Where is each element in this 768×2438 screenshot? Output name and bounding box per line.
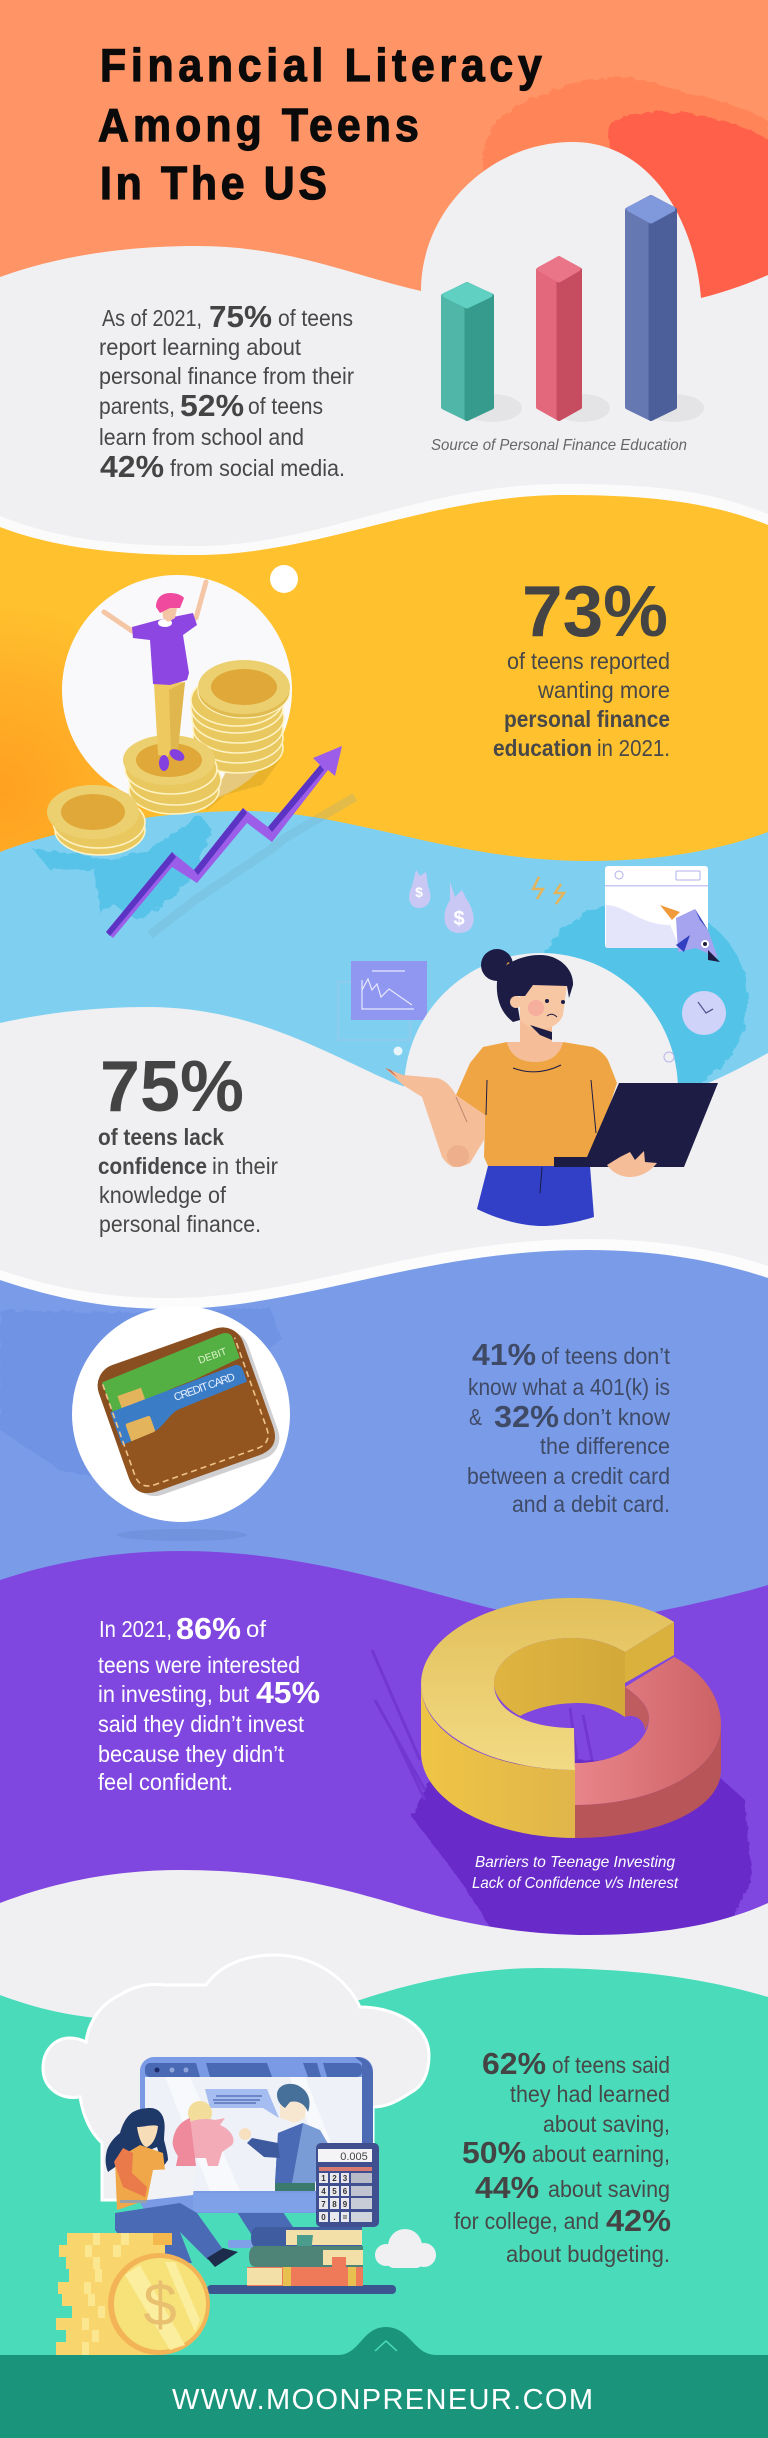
text block: sources of learning: of teens [248,393,323,419]
text block: 73 percent: wanting more [537,677,670,703]
text block: 73 percent: in 2021. [597,735,670,761]
text block: what teens learned about: 42% [606,2203,671,2238]
bun [481,949,513,981]
yellow inner wall [494,1638,625,1717]
girl figure [106,2108,238,2267]
wallet icon: DEBIT [197,1346,228,1367]
text block: what teens learned about: 44% [475,2170,539,2205]
text block: 401k and card difference [467,1337,671,1517]
text block: sources of learning [99,299,354,484]
calculator: 4 [321,2187,326,2196]
text block: interest in investing: teens were interested [98,1652,300,1678]
text block: interest in investing: In 2021, [99,1616,172,1642]
panel: blue background [0,811,768,2438]
calculator: 3 [343,2174,348,2183]
text block: interest in investing [98,1611,320,1795]
blue bar [628,198,674,418]
yellow cut face [625,1622,674,1683]
panel: what teens learned [0,1955,768,2438]
calculator: = [343,2213,348,2222]
coin stack tall [191,660,290,773]
website url: WWW.MOONPRENEUR.COM [172,2384,593,2416]
red bar [538,258,580,418]
monitor [140,2057,396,2294]
text block: interest in investing: 86% [176,1611,241,1646]
icon: chevron up [375,2341,397,2351]
small cloud [375,2229,436,2268]
text block: 75 percent: confidence [98,1153,207,1179]
calculator [316,2143,379,2227]
text block: 401k and card difference: the difference [540,1433,670,1459]
panel: credit card knowledge [0,1239,768,2438]
text block: sources of learning: 52% [180,388,244,423]
title: In The US [100,159,327,209]
illustration: teen on coin stacks [32,582,355,938]
wallet shadow [117,1529,247,1541]
text block: sources of learning: of teens [278,305,353,331]
text block: 73 percent: personal finance [504,706,670,732]
donut chart caption [472,1854,679,1892]
text block: 401k and card difference: between a credit card [467,1463,670,1489]
text block: sources of learning: learn from school and [99,424,304,450]
text block: 401k and card difference: of teens don’t [541,1343,671,1369]
calculator: 9 [343,2200,348,2209]
panel: investing confidence [0,1551,768,2438]
shirt [456,1042,617,1166]
coin shadow [205,745,280,812]
small bubble [270,565,298,593]
text block: what teens learned about: of teens said [552,2052,670,2078]
laptop [554,1083,718,1167]
icon: falling chart [338,961,427,1040]
big dollar coin [108,2253,210,2355]
text block: 401k and card difference: don’t know [563,1404,670,1430]
donut chart caption: Barriers to Teenage Investing [475,1854,675,1871]
text block: 75 percent: 75% [100,1047,244,1127]
wallet icon: CREDIT CARD [172,1371,237,1404]
text block: sources of learning: report learning about [99,334,302,360]
text block: sources of learning: personal finance from their [99,363,354,389]
thought bubble circle [62,575,292,805]
text block: what teens learned about: for college, and [454,2208,599,2234]
calculator: . [333,2213,336,2222]
calculator: 1 [321,2174,326,2183]
text block: what teens learned about: they had learned [510,2081,670,2107]
big dollar coin: $ [143,2271,177,2338]
text block: 401k and card difference: and a debit card. [512,1491,670,1517]
text block: 401k and card difference: 41% [472,1337,536,1372]
text block: what teens learned about: 50% [462,2135,526,2170]
calculator: 0.005 [340,2151,368,2163]
coin stack low [47,785,145,855]
text block: what teens learned about: about saving [548,2176,670,2202]
rising arrow [106,746,342,938]
arm [385,1068,485,1167]
icon: large dollar bag: $ [453,908,465,930]
text block: 73 percent: of teens reported [507,648,670,674]
right arm [590,1095,613,1135]
chart caption: Source of Personal Finance Education [431,437,687,454]
calculator: 8 [332,2200,337,2209]
speech bubble [205,2089,279,2118]
text block: 75 percent: knowledge of [99,1182,227,1208]
calculator: 6 [343,2187,348,2196]
text block: interest in investing: feel confident. [98,1769,233,1795]
text block: 401k and card difference: 32% [494,1399,559,1434]
icon: large dollar bag [444,882,474,933]
yellow side [421,1684,575,1838]
cloud [43,1955,429,2200]
text block: 401k and card difference: know what a 401(k) is [468,1374,670,1400]
panel: gray divider [0,1870,768,2438]
wallet icon [92,1320,285,1503]
text block: what teens learned about: about saving, [543,2111,670,2137]
text block: what teens learned about: 62% [482,2046,546,2081]
text block: 73 percent: education [493,735,592,761]
3D donut chart [421,1598,721,1838]
title [98,41,542,209]
text block: sources of learning: from social media. [170,455,345,481]
icon: small dollar bag: $ [415,884,423,900]
text block: interest in investing: of [246,1616,267,1642]
text block: 75 percent [98,1047,278,1237]
text block: sources of learning: 42% [100,449,164,484]
text block: what teens learned about: about earning, [532,2141,670,2167]
blue splash shadow [32,815,212,920]
icon: browser window with rocket [605,866,720,962]
text block: sources of learning: As of 2021, [102,305,202,331]
icon: lightning bolts [533,877,564,904]
teal bar [444,284,492,418]
text block: interest in investing: in investing, but [98,1681,250,1707]
pink top [575,1657,721,1805]
text block: 75 percent: of teens lack [98,1124,224,1150]
books [247,2227,363,2286]
calculator: 5 [332,2187,337,2196]
arrow shadow [150,797,355,935]
text block: 73 percent [493,572,670,761]
pink side [575,1725,721,1838]
teen figure [104,582,206,771]
text block: interest in investing: because they didn’t [98,1741,285,1767]
pink wall [625,1687,649,1731]
man figure [239,2084,330,2191]
coin stack middle [123,735,221,814]
shorts [477,1166,594,1226]
text block: 73 percent: 73% [522,572,668,652]
calculator: 2 [332,2174,337,2183]
title: Among Teens [98,101,419,151]
calculator: 0 [321,2213,326,2222]
wallet circle [72,1306,290,1522]
coin stack [56,2233,210,2355]
donut chart caption: Lack of Confidence v/s Interest [472,1875,679,1892]
bar chart [444,198,704,422]
hair [497,955,573,1022]
icon: clock [682,991,726,1035]
yellow top [421,1598,674,1770]
text block: 401k and card difference: & [469,1404,482,1430]
text block: 75 percent: personal finance. [99,1211,261,1237]
text block: sources of learning: parents, [99,393,175,419]
icon: small dollar bag [409,870,430,908]
piggy bank [173,2101,234,2166]
neck [507,1015,563,1062]
hand [607,1151,657,1177]
text block: sources of learning: 75% [209,299,272,334]
text block: 75 percent: in their [212,1153,278,1179]
brush stroke [372,1650,752,1950]
title: Financial Literacy [100,41,542,91]
footer [0,2327,768,2438]
calculator: 7 [321,2200,326,2209]
text block: what teens learned about: about budgeting. [506,2241,670,2267]
face [520,985,567,1029]
text block: interest in investing: said they didn’t invest [98,1711,305,1737]
text block: interest in investing: 45% [256,1675,320,1710]
illustration: confused teen with laptop [385,949,718,1226]
icon: dollar and clock decorations [338,866,748,1100]
text block: what teens learned about [454,2046,671,2267]
panel: lack of confidence [0,949,768,2438]
